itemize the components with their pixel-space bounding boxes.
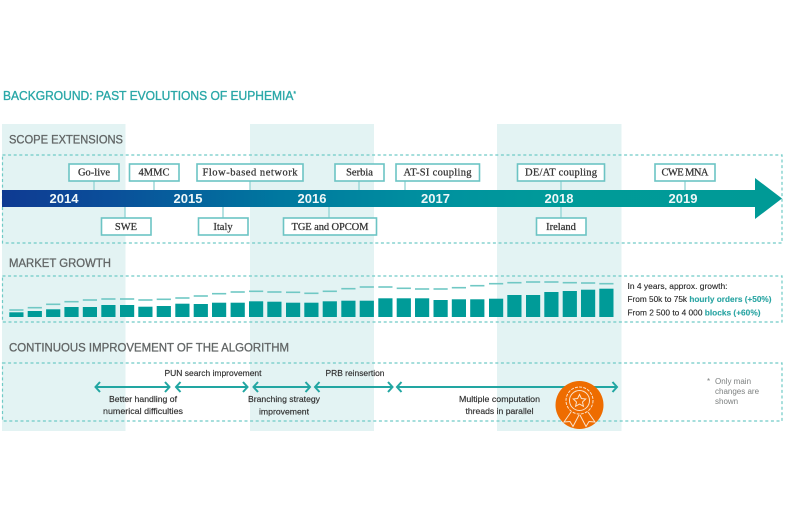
label: branching strategy: improvement — [259, 406, 310, 416]
label: PRB reinsertion: PRB reinsertion — [326, 368, 385, 378]
market panel frame — [2, 276, 782, 322]
footnote: changes are — [715, 387, 760, 396]
tag: DE/AT coupling: DE/AT coupling — [525, 168, 598, 178]
panel: market growth — [2, 258, 782, 322]
label: PUN search improvement: PUN search improvement — [164, 368, 262, 378]
tag: 4MMC: 4MMC — [139, 168, 169, 178]
label: better handling: Better handling of — [109, 394, 178, 404]
algorithm panel frame — [2, 363, 782, 421]
arrow: PUN search — [176, 382, 248, 392]
tag: DE/AT coupling — [518, 164, 604, 181]
panel: continuous improvement of the algorithm — [2, 342, 782, 429]
tag: CWE MNA: CWE MNA — [662, 168, 709, 178]
footnote: shown — [715, 397, 738, 406]
timeline arrow with years: 2019 — [669, 191, 697, 206]
icon: award medal — [556, 381, 604, 429]
heading: scope extensions: SCOPE EXTENSIONS — [9, 134, 123, 146]
heading: continuous improvement: CONTINUOUS IMPROVEMENT OF THE ALGORITHM — [9, 342, 289, 354]
tag: Go-live: Go-live — [78, 168, 110, 178]
arrow: PRB reinsertion — [315, 382, 392, 392]
tag: Serbia — [335, 164, 384, 181]
tag: SWE: SWE — [115, 222, 137, 233]
tag: Flow-based network: Flow-based network — [202, 168, 298, 178]
tag: SWE — [102, 218, 151, 235]
line chart: hourly orders — [9, 282, 614, 310]
year band: 2014 — [2, 124, 126, 431]
tag: Italy — [198, 218, 248, 235]
year band: 2018 — [497, 124, 622, 431]
arrow: multiple computation threads — [397, 382, 617, 392]
bar chart: blocks — [9, 289, 614, 317]
growth note — [628, 281, 772, 318]
title: * — [293, 91, 296, 98]
tag: Italy: Italy — [213, 222, 233, 233]
tag: TGE and OPCOM — [284, 218, 376, 235]
tag: Flow-based network — [197, 164, 303, 181]
panel: scope extensions — [2, 134, 782, 243]
timeline arrow with years: 2017 — [421, 191, 450, 206]
label: multiple computation: threads in parallel — [466, 406, 534, 416]
tag: Serbia: Serbia — [346, 168, 373, 178]
arrow: branching strategy — [254, 382, 310, 392]
timeline arrow with years: 2014 — [50, 191, 79, 206]
footnote: * — [707, 377, 710, 386]
arrow: better handling — [96, 382, 170, 392]
timeline arrow with years: 2015 — [174, 191, 202, 206]
label: better handling: numerical difficulties — [103, 406, 183, 416]
timeline arrow with years: 2018 — [545, 191, 573, 206]
tag: TGE and OPCOM: TGE and OPCOM — [292, 222, 369, 233]
tag: CWE MNA — [655, 164, 715, 181]
timeline arrow with years: 2016 — [298, 191, 326, 206]
tag: Ireland: Ireland — [546, 222, 577, 233]
growth note: From 50k to 75k hourly orders (+50%) — [628, 294, 772, 304]
timeline arrow with years — [2, 178, 782, 219]
tag: Go-live — [69, 164, 119, 181]
timeline connector ticks — [94, 181, 685, 218]
heading: market growth: MARKET GROWTH — [9, 258, 111, 270]
year band: 2016 — [250, 124, 374, 431]
scope panel frame — [2, 155, 782, 243]
label: multiple computation: Multiple computation — [459, 394, 540, 404]
growth note: In 4 years, approx. growth: — [628, 281, 728, 291]
growth note: From 2 500 to 4 000 blocks (+60%) — [628, 308, 761, 318]
tag: Ireland — [536, 218, 586, 235]
footnote — [707, 377, 760, 406]
tag: AT-SI coupling — [396, 164, 480, 181]
tag: 4MMC — [130, 164, 179, 181]
footnote: Only main — [715, 377, 751, 386]
tag: AT-SI coupling: AT-SI coupling — [404, 168, 472, 178]
label: branching strategy: Branching strategy — [248, 394, 321, 404]
title: BACKGROUND: PAST EVOLUTIONS OF EUPHEMIA — [3, 89, 305, 103]
